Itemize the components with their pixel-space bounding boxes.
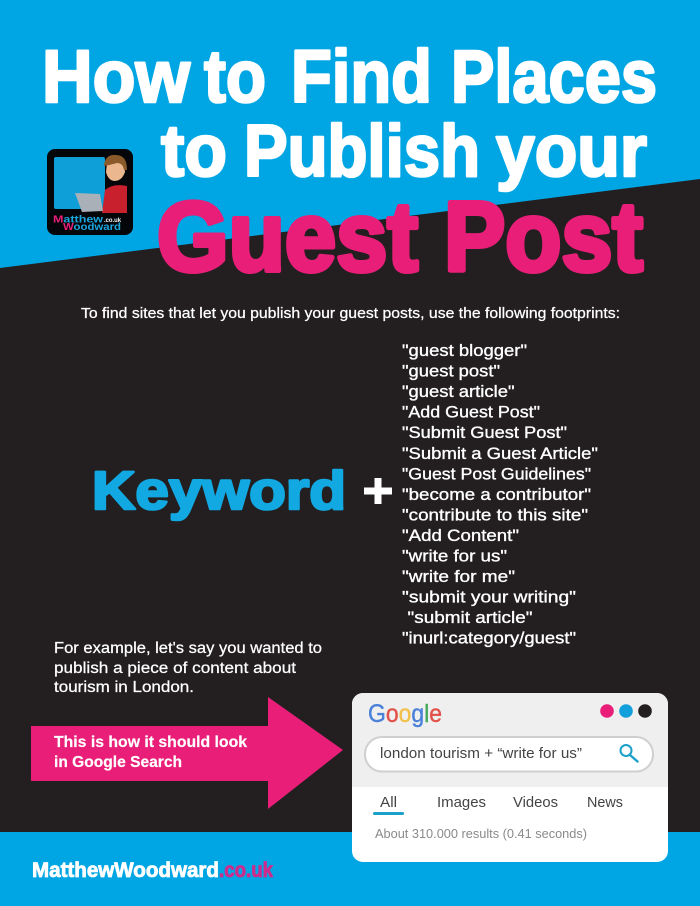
result tabs: News	[587, 795, 623, 811]
title line 1	[42, 35, 657, 118]
result tabs: All	[380, 795, 397, 811]
logo wordmark: Woodward	[63, 222, 121, 233]
footprint list: "Add Guest Post"	[402, 402, 540, 422]
footprint list: "become a contributor"	[402, 485, 591, 504]
footer band	[0, 832, 700, 906]
logo badge	[47, 149, 133, 235]
title line 2	[161, 111, 647, 192]
result tabs: Videos	[513, 795, 558, 811]
footprint list: "submit your writing"	[402, 588, 576, 606]
results count: About 310.000 results (0.41 seconds)	[375, 827, 587, 841]
footprint list: "guest article"	[402, 382, 514, 401]
title line 1: How	[42, 35, 190, 118]
example text: publish a piece of content about	[54, 660, 297, 677]
title line 3: Post	[444, 182, 643, 292]
window dots	[600, 704, 652, 718]
result tabs: Images	[437, 795, 486, 811]
google search card	[352, 693, 668, 862]
arrow caption: in Google Search	[54, 754, 182, 771]
footprint list: "guest post"	[402, 362, 500, 380]
footprint list: "Submit a Guest Article"	[402, 444, 598, 463]
footprint list: "submit article"	[408, 608, 532, 627]
character illustration	[75, 155, 127, 213]
footprint list: "Submit Guest Post"	[402, 423, 567, 442]
title line 2: Publish	[244, 111, 480, 192]
example text: tourism in London.	[54, 679, 194, 696]
logo wordmark: .co.uk	[104, 218, 122, 224]
keyword label: Keyword	[92, 461, 346, 521]
example text	[54, 640, 322, 696]
plus sign	[364, 478, 392, 504]
title line 2: your	[496, 111, 647, 192]
header background: blue slanted panel	[0, 0, 700, 268]
intro text: To find sites that let you publish your guest posts, use the following footprints:	[81, 306, 620, 322]
title line 1: Places	[451, 35, 657, 118]
title	[42, 35, 657, 292]
icon: magnifying glass	[620, 745, 638, 762]
footprint list	[402, 341, 598, 648]
footprint list: "inurl:category/guest"	[402, 628, 576, 648]
footprint list: "contribute to this site"	[402, 506, 588, 524]
search box: london tourism + “write for us”	[380, 745, 582, 762]
title line 3	[157, 182, 643, 292]
arrow caption	[54, 734, 247, 771]
footprint list: "Add Content"	[402, 526, 519, 545]
title line 1: Find	[291, 35, 432, 118]
arrow caption: This is how it should look	[54, 734, 247, 751]
title line 2: to	[161, 111, 227, 192]
title line 3: Guest	[157, 182, 418, 292]
footprint list: "Guest Post Guidelines"	[402, 464, 591, 484]
example text: For example, let's say you wanted to	[54, 640, 322, 657]
footprint list: "write for me"	[402, 567, 515, 586]
search box	[365, 737, 653, 772]
footprint list: "write for us"	[402, 546, 507, 566]
footer brand: MatthewWoodward	[32, 859, 219, 882]
logo wordmark: Matthew	[53, 214, 103, 226]
footer brand: .co.uk	[219, 859, 273, 882]
result tabs	[373, 795, 623, 815]
footprint list: "guest blogger"	[402, 341, 527, 360]
pink arrow	[31, 697, 343, 809]
logo wordmark	[53, 214, 122, 233]
title line 1: to	[204, 35, 266, 118]
google logo: Google	[368, 700, 442, 728]
